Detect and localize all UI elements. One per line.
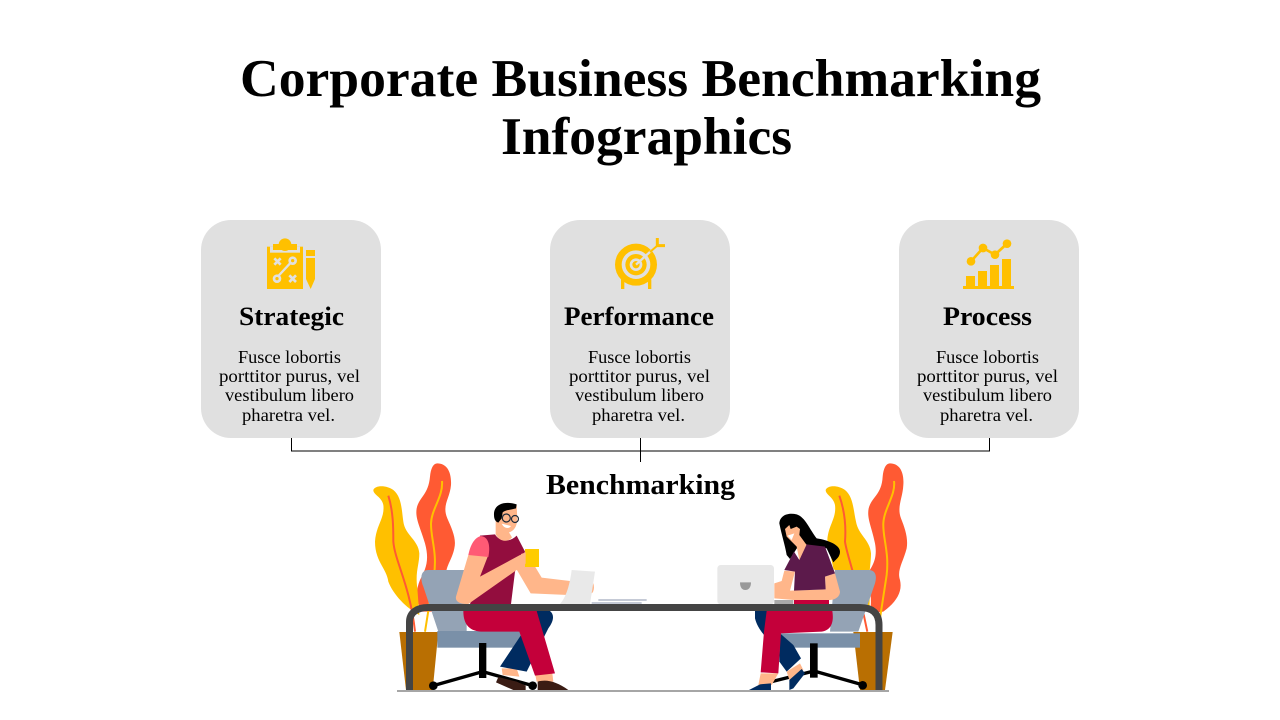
card body text: vestibulum libero xyxy=(923,385,1052,405)
connector lines xyxy=(292,438,990,462)
chair xyxy=(421,570,537,690)
title xyxy=(240,50,1041,166)
card body text: Fusce lobortis xyxy=(588,347,691,367)
plant right xyxy=(826,463,907,690)
card body text: Fusce lobortis xyxy=(936,347,1039,367)
card body text: pharetra vel. xyxy=(242,405,335,425)
icon: target xyxy=(615,238,665,289)
card body text: pharetra vel. xyxy=(940,405,1033,425)
title: Corporate Business Benchmarking xyxy=(240,50,1041,108)
laptop xyxy=(717,565,793,605)
card body text: porttitor purus, vel xyxy=(917,366,1058,386)
card heading: Process xyxy=(943,302,1032,331)
card heading: Strategic xyxy=(239,302,344,331)
illustration: man at desk xyxy=(373,463,647,690)
woman xyxy=(749,514,840,690)
card body text: Fusce lobortis xyxy=(238,347,341,367)
panel: performance xyxy=(550,220,730,438)
papers on desk xyxy=(592,599,647,604)
title: Infographics xyxy=(501,108,792,166)
chair xyxy=(772,570,876,690)
card body text xyxy=(917,347,1058,425)
card body text: porttitor purus, vel xyxy=(219,366,360,386)
illustration: woman at desk xyxy=(717,463,907,690)
icon: growth chart xyxy=(963,239,1014,289)
heading: benchmarking: Benchmarking xyxy=(546,470,735,501)
man xyxy=(456,503,595,690)
plant left xyxy=(373,463,455,690)
table xyxy=(397,608,889,692)
panel: strategic xyxy=(201,220,381,438)
card body text: vestibulum libero xyxy=(225,385,354,405)
card heading: Performance xyxy=(564,302,714,331)
card body text xyxy=(219,347,360,425)
card body text: vestibulum libero xyxy=(575,385,704,405)
card body text: pharetra vel. xyxy=(592,405,685,425)
panel: process xyxy=(899,220,1079,438)
card body text: porttitor purus, vel xyxy=(569,366,710,386)
card body text xyxy=(569,347,710,425)
icon: clipboard and pencil xyxy=(267,238,315,289)
